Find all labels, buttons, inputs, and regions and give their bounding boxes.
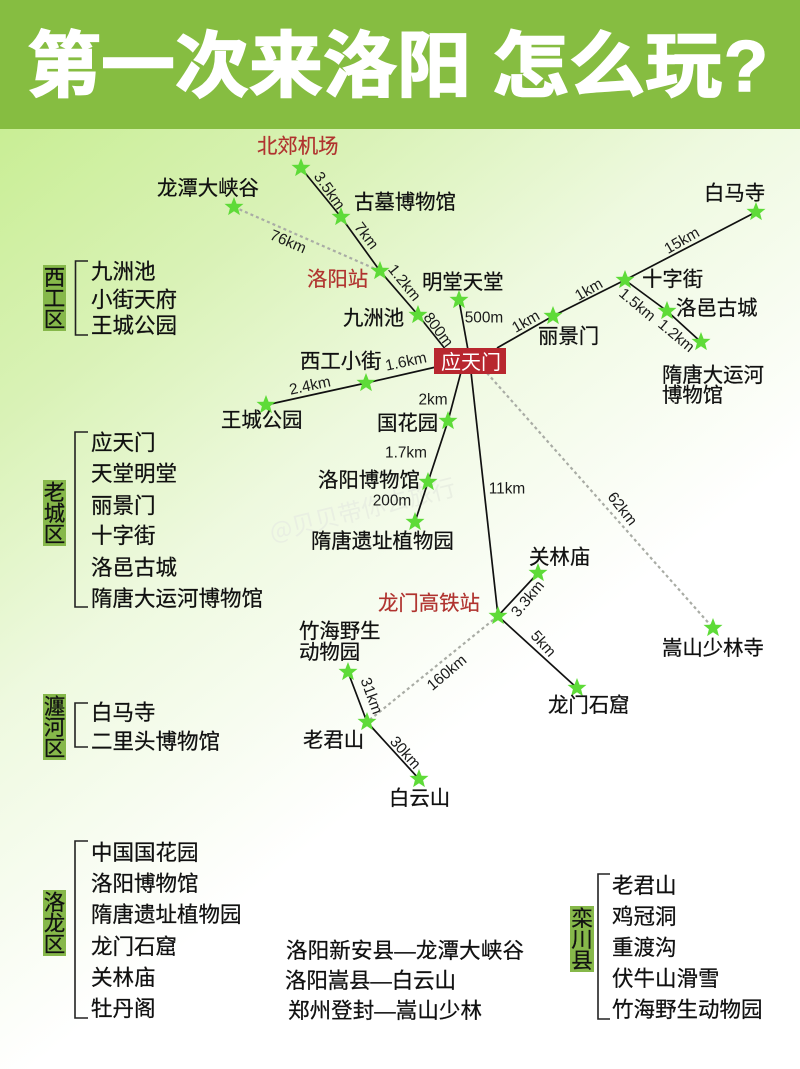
panel: 栾川县: 县 xyxy=(571,944,593,975)
panel: 栾川县: 竹海野生动物园 xyxy=(612,993,763,1024)
panel: 老城区: 十字街 xyxy=(91,519,156,550)
place names: 洛阳博物馆 xyxy=(318,463,420,493)
place names: 白云山 xyxy=(389,781,450,811)
panel: 栾川县: 川 xyxy=(571,923,593,954)
panel: 洛龙区: 牡丹阁 xyxy=(91,992,156,1023)
place names: 动物园 xyxy=(299,635,360,665)
panel: 西工区 xyxy=(43,255,177,340)
route lines: dotted xyxy=(234,207,713,722)
panel: 洛龙区 xyxy=(43,836,242,1023)
place names: 古墓博物馆 xyxy=(354,185,456,215)
distance labels: 500m xyxy=(465,310,503,326)
place names: 龙门高铁站 xyxy=(378,586,480,616)
panel: 栾川县: 老君山 xyxy=(612,869,677,900)
panel: 老城区: 洛邑古城 xyxy=(91,551,177,582)
panel: 西工区: 西 xyxy=(44,261,65,292)
place names: 关林庙 xyxy=(529,540,590,570)
star markers xyxy=(224,158,766,787)
panel: 洛龙区: 中国国花园 xyxy=(91,836,199,867)
distance labels: 5km xyxy=(527,628,559,660)
distance labels: 1.5km xyxy=(615,285,659,325)
text block: counties: 洛阳新安县—龙潭大峡谷 xyxy=(286,934,524,965)
distance labels: 30km xyxy=(386,733,424,773)
panel: 老城区: 区 xyxy=(44,518,65,549)
panel: 老城区: 应天门 xyxy=(91,426,156,457)
panel: 瀍河区: 瀍 xyxy=(44,690,65,721)
panel: 栾川县: 伏牛山滑雪 xyxy=(612,962,720,993)
place names: 明堂天堂 xyxy=(422,265,504,295)
panel: 老城区 xyxy=(43,426,263,613)
center station: 应天门: 应天门 xyxy=(441,346,501,375)
distance labels: 62km xyxy=(604,489,640,529)
distance labels: 160km xyxy=(424,652,470,694)
place names xyxy=(157,129,765,811)
place names: 十字街 xyxy=(642,262,703,292)
place names: 龙潭大峡谷 xyxy=(157,171,259,201)
text block: counties xyxy=(285,934,524,1025)
panel: 洛龙区: 隋唐遗址植物园 xyxy=(91,898,242,929)
place names: 老君山 xyxy=(303,723,364,753)
distance labels: 3.3km xyxy=(508,577,548,621)
panel: 西工区: 王城公园 xyxy=(91,309,177,340)
panel: 瀍河区: 区 xyxy=(44,732,65,763)
distance labels: 76km xyxy=(267,227,309,257)
distance labels: 800m xyxy=(420,310,456,350)
panel: 老城区: 城 xyxy=(44,497,65,528)
distance labels: 1km xyxy=(509,307,543,337)
place names: 洛邑古城 xyxy=(676,291,758,321)
route map xyxy=(157,129,766,811)
place names: 西工小街 xyxy=(300,344,382,374)
text block: counties: 郑州登封—嵩山少林 xyxy=(288,994,482,1025)
title banner: 怎么玩 xyxy=(492,7,722,112)
panel: 栾川县: 鸡冠洞 xyxy=(612,900,677,931)
panel: 栾川县: 重渡沟 xyxy=(612,931,677,962)
place names: 博物馆 xyxy=(662,378,723,408)
place names: 龙门石窟 xyxy=(548,688,630,718)
place names: 九洲池 xyxy=(343,301,404,331)
distance labels: 2.4km xyxy=(288,373,332,399)
panel: 老城区: 丽景门 xyxy=(91,489,156,520)
distance labels: 200m xyxy=(373,492,411,510)
place names: 嵩山少林寺 xyxy=(662,631,764,661)
distance labels: 1.6km xyxy=(384,349,428,375)
panel: 洛龙区: 洛阳博物馆 xyxy=(91,867,199,898)
title banner: 第一次来洛阳 xyxy=(27,7,471,112)
route lines: solid xyxy=(266,168,756,779)
distance labels: 3.5km xyxy=(310,169,348,213)
panel: 老城区: 隋唐大运河博物馆 xyxy=(91,582,263,613)
panel: 老城区: 天堂明堂 xyxy=(91,457,177,488)
place names: 白马寺 xyxy=(704,176,765,206)
panel: 洛龙区: 龙 xyxy=(44,907,65,938)
place names: 丽景门 xyxy=(538,319,599,349)
place names: 洛阳站 xyxy=(307,262,368,292)
place names: 国花园 xyxy=(377,406,438,436)
place names: 王城公园 xyxy=(221,403,303,433)
title banner: ? xyxy=(724,27,768,107)
panel: 栾川县: 栾 xyxy=(571,902,593,933)
title banner xyxy=(0,0,800,129)
panel: 洛龙区: 龙门石窟 xyxy=(91,930,177,961)
panel: 洛龙区: 关林庙 xyxy=(91,961,156,992)
distance labels: 1.2km xyxy=(654,316,698,356)
place names: 隋唐大运河 xyxy=(662,358,764,388)
distance labels: 31km xyxy=(357,675,385,717)
panel: 西工区: 小街天府 xyxy=(91,283,177,314)
panel: 瀍河区: 白马寺 xyxy=(91,696,156,727)
distance labels: 11km xyxy=(489,480,525,498)
distance labels xyxy=(267,169,703,773)
panel: 瀍河区: 二里头博物馆 xyxy=(91,725,220,756)
panel: 栾川县 xyxy=(570,869,763,1024)
place names: 北郊机场 xyxy=(257,129,339,159)
place names: 竹海野生 xyxy=(299,614,381,644)
distance labels: 1.7km xyxy=(385,444,427,462)
panel: 西工区: 九洲池 xyxy=(91,255,156,286)
distance labels: 2km xyxy=(418,392,448,408)
watermark: @贝贝带你去旅行 xyxy=(265,468,459,548)
panel: 瀍河区 xyxy=(43,690,220,763)
panel: 老城区: 老 xyxy=(44,476,65,507)
panel: 西工区: 区 xyxy=(44,303,65,334)
distance labels: 1.2km xyxy=(384,261,424,305)
panel: 瀍河区: 河 xyxy=(44,711,65,742)
panel: 洛龙区: 区 xyxy=(44,928,65,959)
place names: 隋唐遗址植物园 xyxy=(311,524,454,554)
text block: counties: 洛阳嵩县—白云山 xyxy=(285,964,456,995)
distance labels: 1km xyxy=(572,275,606,305)
distance labels: 15km xyxy=(661,224,703,258)
panel: 洛龙区: 洛 xyxy=(44,886,65,917)
distance labels: 7km xyxy=(350,219,382,253)
panel: 西工区: 工 xyxy=(44,282,65,313)
